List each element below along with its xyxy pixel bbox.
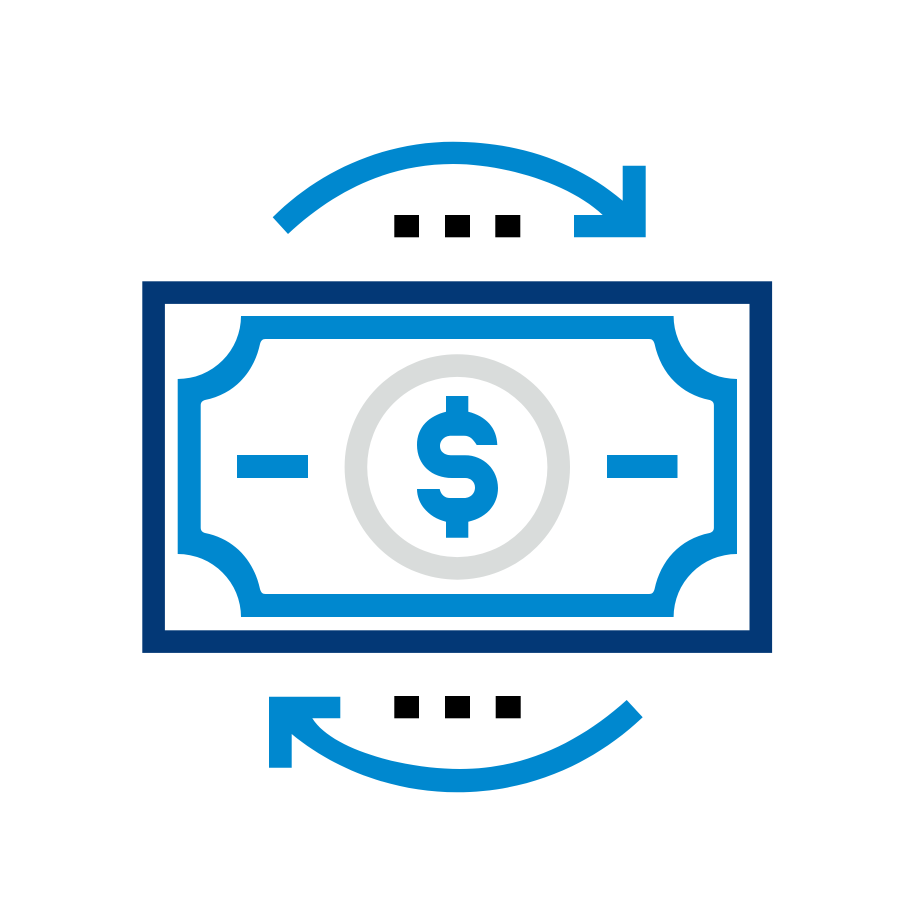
- right dash on banknote: [607, 455, 678, 478]
- bottom row of three dots: [394, 696, 521, 718]
- left dash on banknote: [237, 455, 308, 478]
- panel: banknote outer frame: [154, 293, 761, 642]
- banknote inner scalloped border: [178, 316, 737, 617]
- arrow: top curved arrow pointing right: [273, 142, 646, 237]
- arrow: bottom curved arrow pointing left: [269, 697, 643, 792]
- grey circle medallion: [356, 366, 559, 568]
- top row of three dots: [394, 215, 520, 237]
- icon: dollar sign: [417, 396, 498, 538]
